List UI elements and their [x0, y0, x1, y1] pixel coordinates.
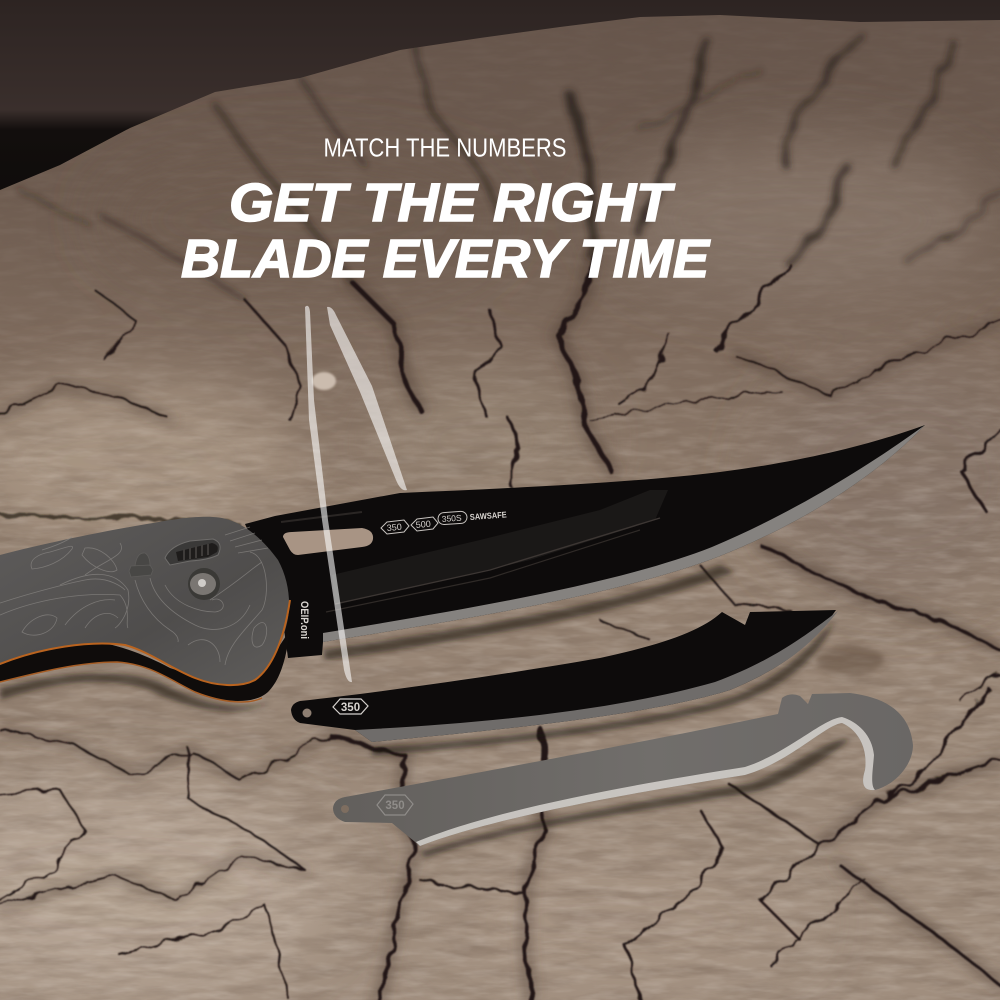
crack shadow bands	[0, 255, 1000, 1000]
object shadows	[0, 565, 850, 858]
topographic contour lines	[0, 527, 268, 665]
badge 350	[333, 699, 368, 714]
knife: main folding knife	[0, 425, 925, 702]
sharper mid and lower cracks	[0, 255, 1000, 1000]
pivot screw	[188, 568, 220, 600]
title line 1: GET THE RIGHT	[229, 173, 675, 233]
blurred upper cracks	[20, 35, 1000, 300]
stamp 350S: 350S	[441, 513, 462, 524]
title line 2: BLADE EVERY TIME	[181, 229, 711, 289]
lock glyph	[129, 553, 153, 577]
brush arrow lines pointing to blades	[305, 306, 407, 682]
blade stamp markings	[381, 509, 507, 534]
subtitle: MATCH THE NUMBERS	[324, 132, 566, 162]
stamp 350: 350	[386, 522, 402, 533]
tang slot showing wood	[283, 528, 373, 555]
handle liner black	[0, 630, 290, 701]
slider switch	[165, 539, 220, 565]
replacement gut-hook blade	[333, 693, 913, 846]
replacement drop-point blade	[291, 610, 838, 742]
badge 350: 350	[341, 702, 360, 714]
blade	[245, 425, 925, 658]
handle orange lower liner	[0, 662, 262, 702]
wood grain texture	[0, 318, 1000, 1000]
handle orange edge	[0, 600, 290, 685]
small pebble	[312, 372, 336, 390]
badge 350: 350	[385, 800, 405, 812]
dark background above stump	[0, 0, 1000, 200]
stamp 500: 500	[415, 519, 431, 530]
title	[181, 173, 711, 289]
bolster logo text: OEIP.oni	[298, 601, 310, 639]
badge 350	[377, 795, 413, 815]
stamp sawsafe: SAWSAFE	[469, 509, 507, 522]
grey handle scale	[0, 517, 289, 685]
rough patch beside blade	[816, 646, 884, 674]
